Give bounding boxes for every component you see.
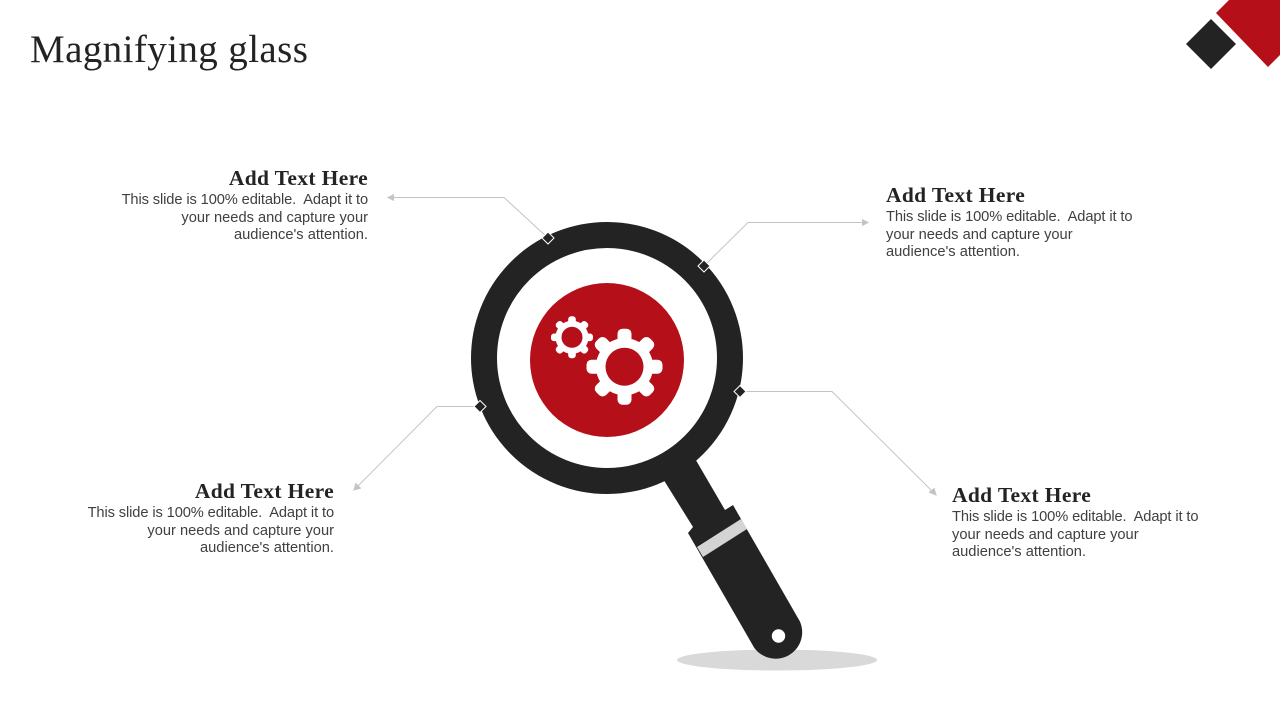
text block: bottom right: This slide is 100% editable. Adapt it to — [952, 509, 1198, 525]
corner decoration — [1186, 0, 1280, 69]
title: Magnifying glass — [30, 28, 308, 71]
arrow: bottom left — [354, 406, 480, 490]
text block: bottom left: your needs and capture your — [147, 523, 334, 539]
icon: large gear — [586, 329, 662, 405]
text block: top right: your needs and capture your — [886, 227, 1073, 243]
text block: bottom right: Add Text Here — [952, 483, 1091, 507]
text block: top left: your needs and capture your — [181, 210, 368, 226]
text block: bottom left: audience's attention. — [200, 540, 334, 556]
text block: top left — [122, 166, 368, 243]
text block: bottom left: This slide is 100% editable. Adapt it to — [88, 505, 334, 521]
text block: top right: This slide is 100% editable. Adapt it to — [886, 209, 1132, 225]
marker: bottom left — [474, 400, 486, 412]
lens ring — [484, 235, 730, 481]
marker: top right — [698, 260, 710, 272]
text block: bottom right: audience's attention. — [952, 544, 1086, 560]
red lens disc — [530, 283, 684, 437]
text block: bottom left: Add Text Here — [195, 479, 334, 503]
arrow: bottom right — [740, 392, 936, 495]
text block: bottom left — [88, 479, 334, 556]
handle band — [697, 519, 747, 557]
icon: small gear — [551, 316, 593, 358]
text block: top right: Add Text Here — [886, 183, 1025, 207]
text block: top left: audience's attention. — [234, 227, 368, 243]
handle — [652, 441, 802, 659]
marker: bottom right — [734, 386, 746, 398]
marker: top left — [542, 232, 554, 244]
text block: top right: audience's attention. — [886, 244, 1020, 260]
text block: top right — [886, 183, 1132, 260]
arrow: top right — [704, 220, 868, 266]
ground shadow — [677, 650, 877, 670]
text block: bottom right: your needs and capture your — [952, 527, 1139, 543]
magnifying glass — [484, 235, 802, 659]
text block: bottom right — [952, 483, 1198, 560]
arrow: top left — [388, 194, 548, 238]
handle hole — [772, 629, 785, 643]
text block: top left: Add Text Here — [229, 166, 368, 190]
text block: top left: This slide is 100% editable. Adapt it to — [122, 192, 368, 208]
